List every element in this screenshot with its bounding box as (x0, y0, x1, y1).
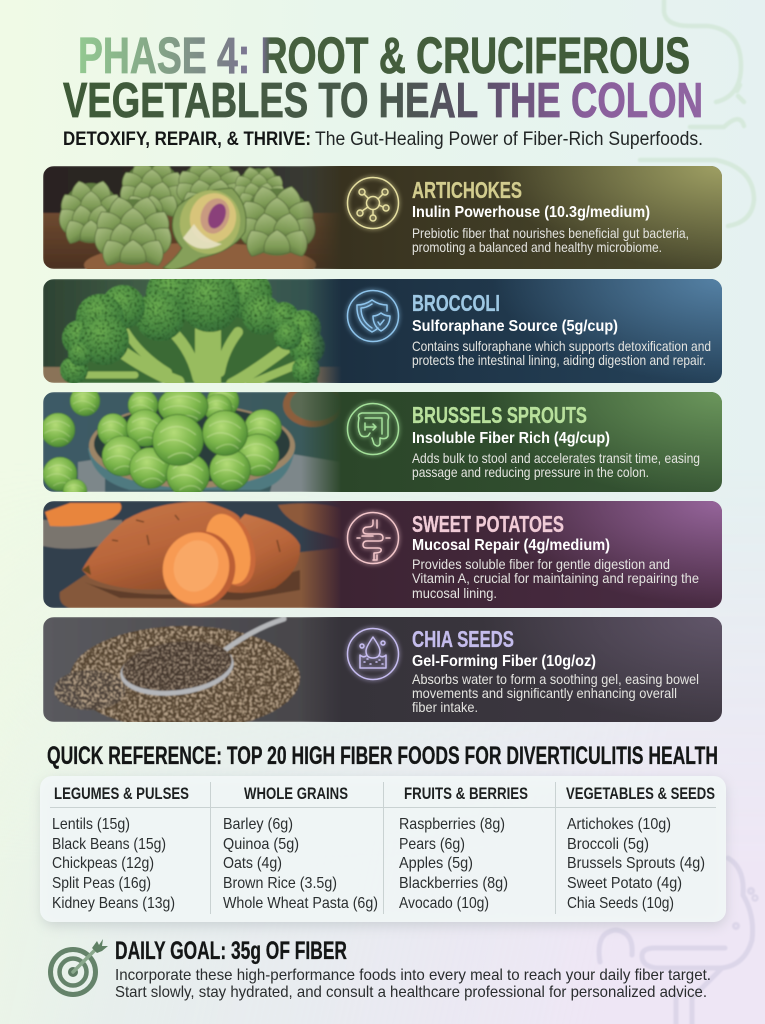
icon: water drop on gel (348, 628, 398, 680)
panel: sweet potatoes (43, 501, 722, 616)
column: legumes and pulses: LEGUMES & PULSES (54, 784, 189, 803)
description: Sweet Potatoes (412, 557, 699, 601)
subheading: Broccoli: Sulforaphane Source (5g/cup) (412, 318, 618, 335)
description: Broccoli: Contains sulforaphane which supports detoxification and (412, 339, 711, 354)
description: Brussels Sprouts: passage and reducing pressure in the colon. (412, 465, 649, 480)
watermark: intestine outline top right (640, 0, 754, 226)
column: legumes and pulses: Black Beans (15g) (52, 836, 166, 853)
panel background: sweet potatoes (304, 501, 722, 608)
subtitle: The Gut-Healing Power of Fiber-Rich Superfoods. (315, 128, 703, 150)
text block: daily goal advice: Incorporate these high-performance foods into every meal to reach your daily fiber target. (115, 967, 711, 984)
description: Broccoli (412, 339, 711, 368)
column: vegetables and seeds (566, 784, 715, 912)
icon: intestine (348, 512, 398, 564)
description: Brussels Sprouts: Adds bulk to stool and accelerates transit time, easing (412, 451, 700, 466)
subheading: Artichokes: Inulin Powerhouse (10.3g/medium) (412, 204, 650, 221)
description: Chia Seeds: fiber intake. (412, 700, 478, 715)
column: whole grains: Brown Rice (3.5g) (223, 875, 337, 892)
heading: Broccoli: BROCCOLI (412, 290, 500, 316)
heading: Chia Seeds: CHIA SEEDS (412, 626, 514, 652)
description: Artichokes: Prebiotic fiber that nourishes beneficial gut bacteria, (412, 226, 689, 241)
subheading: Brussels Sprouts: Insoluble Fiber Rich (4g/cup) (412, 430, 610, 447)
description: Artichokes: promoting a balanced and healthy microbiome. (412, 240, 662, 255)
icon: target with arrow (50, 939, 108, 994)
column: whole grains: Barley (6g) (223, 816, 293, 833)
icon: shield with check (348, 290, 398, 342)
column: fruits and berries: Apples (5g) (399, 855, 473, 872)
description: Sweet Potatoes: mucosal lining. (412, 586, 497, 601)
photo: artichokes on wooden board (43, 166, 340, 269)
description: Chia Seeds: movements and significantly enhancing overall (412, 686, 677, 701)
watermark: intestine outline bottom right (599, 858, 756, 1024)
panel: broccoli (43, 279, 722, 383)
panel background: chia seeds (305, 617, 722, 722)
column: vegetables and seeds: Artichokes (10g) (567, 816, 671, 833)
column: legumes and pulses: Kidney Beans (13g) (52, 895, 175, 912)
photo: bowl of brussels sprouts (43, 392, 340, 492)
panel background: brussels sprouts (304, 392, 722, 492)
column: whole grains: WHOLE GRAINS (244, 784, 348, 803)
panel background: broccoli (310, 279, 722, 383)
column: fruits and berries: FRUITS & BERRIES (404, 784, 528, 803)
column: legumes and pulses: Split Peas (16g) (52, 875, 151, 892)
heading: Sweet Potatoes: SWEET POTATOES (412, 511, 564, 537)
column: vegetables and seeds: Broccoli (5g) (567, 836, 649, 853)
column: whole grains (223, 784, 378, 912)
title (63, 27, 703, 128)
photo: sweet potatoes on board (43, 501, 345, 616)
subtitle: DETOXIFY, REPAIR, & THRIVE: (63, 128, 311, 150)
photo: broccoli (43, 279, 340, 383)
column: fruits and berries: Avocado (10g) (399, 895, 489, 912)
column: legumes and pulses (52, 784, 189, 912)
icon: colon (348, 404, 398, 454)
column: fruits and berries: Pears (6g) (399, 836, 465, 853)
column: legumes and pulses: Lentils (15g) (52, 816, 130, 833)
heading: daily goal: DAILY GOAL: 35g OF FIBER (115, 937, 347, 965)
subheading: Sweet Potatoes: Mucosal Repair (4g/medium) (412, 537, 610, 554)
description: Chia Seeds: Absorbs water to form a soothing gel, easing bowel (412, 672, 699, 687)
heading: Artichokes: ARTICHOKES (412, 177, 522, 203)
column: vegetables and seeds: VEGETABLES & SEEDS (566, 784, 715, 803)
column: fruits and berries (399, 784, 528, 912)
column: vegetables and seeds: Brussels Sprouts (4g) (567, 855, 705, 872)
column: fruits and berries: Raspberries (8g) (399, 816, 505, 833)
column: whole grains: Quinoa (5g) (223, 836, 299, 853)
description: Sweet Potatoes: Provides soluble fiber for gentle digestion and (412, 557, 670, 572)
column: vegetables and seeds: Chia Seeds (10g) (567, 895, 674, 912)
description: Brussels Sprouts (412, 451, 700, 480)
column: legumes and pulses: Chickpeas (12g) (52, 855, 154, 872)
photo: chia seeds and spoon (43, 617, 343, 730)
description: Sweet Potatoes: Vitamin A, crucial for maintaining and repairing the (412, 571, 699, 586)
subtitle (63, 128, 703, 150)
panel: artichokes (43, 166, 722, 269)
column: whole grains: Whole Wheat Pasta (6g) (223, 895, 378, 912)
panel: brussels sprouts (43, 392, 722, 492)
description: Broccoli: protects the intestinal lining, aiding digestion and repair. (412, 353, 706, 368)
page background (0, 464, 765, 1024)
description: Artichokes (412, 226, 689, 255)
icon: network molecule (348, 178, 398, 228)
description: Chia Seeds (412, 672, 699, 715)
column: whole grains: Oats (4g) (223, 855, 282, 872)
subheading: Chia Seeds: Gel-Forming Fiber (10g/oz) (412, 653, 596, 670)
text block: daily goal advice: Start slowly, stay hydrated, and consult a healthcare professional for personalized advice. (115, 984, 707, 1001)
panel background: artichokes (304, 166, 722, 269)
column: fruits and berries: Blackberries (8g) (399, 875, 508, 892)
column: vegetables and seeds: Sweet Potato (4g) (567, 875, 682, 892)
panel: quick reference table (40, 776, 726, 926)
panel: chia seeds (43, 617, 722, 730)
text block: daily goal advice (115, 967, 711, 1001)
heading: Brussels Sprouts: BRUSSELS SPROUTS (412, 402, 587, 428)
